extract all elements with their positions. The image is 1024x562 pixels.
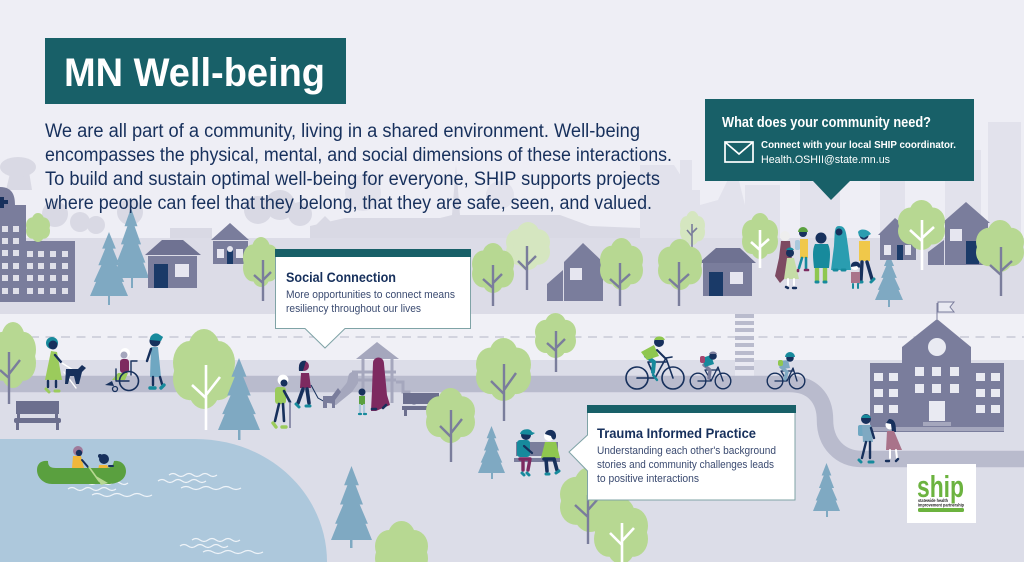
- woman in teal robe: [831, 226, 851, 270]
- SHIP logo: statewide health: [918, 498, 948, 503]
- upper ground: [0, 238, 1024, 316]
- small child: [851, 262, 860, 288]
- tree: [243, 237, 279, 301]
- contact callout: [705, 99, 974, 200]
- icon: envelope: [725, 142, 753, 162]
- bench by playground: [402, 393, 439, 416]
- road centre dashes: [30, 336, 1024, 338]
- tree left edge: [0, 322, 36, 404]
- bench left: [14, 401, 61, 430]
- intro paragraph: where people can feel that they belong, that they are safe, seen, and valued.: [44, 193, 652, 214]
- callout: trauma informed practice: to positive interactions: [597, 473, 699, 485]
- pine tree: [813, 463, 840, 517]
- far pines: [90, 208, 903, 307]
- intro paragraph: To build and sustain optimal well-being for everyone, SHIP supports projects: [45, 169, 660, 190]
- callout: social connection: [275, 249, 471, 348]
- callout: trauma informed practice: Understanding each other's background: [597, 445, 776, 457]
- house 5: [878, 218, 916, 260]
- tree behind hospital: [26, 213, 50, 242]
- lower ground: [0, 360, 1024, 562]
- hospital cross: [0, 197, 8, 208]
- elder with cane: [273, 375, 290, 428]
- lower trees: [0, 313, 576, 430]
- tree bottom: [375, 521, 428, 562]
- title block: MN Well-being: [64, 51, 325, 95]
- callout: social connection: More opportunities to connect means: [286, 289, 455, 301]
- cyclist one: [626, 336, 684, 389]
- pine tree back: [113, 208, 149, 288]
- callout: trauma informed practice: Trauma Informed Practice: [597, 425, 756, 441]
- crosswalk: [735, 314, 754, 377]
- pine tree front: [90, 232, 128, 305]
- pine tree: [331, 466, 372, 548]
- playground: [328, 342, 414, 405]
- person with guide dog: [45, 337, 86, 392]
- flag: [937, 302, 954, 319]
- tree: [600, 238, 643, 306]
- tree: [472, 243, 514, 306]
- title block: [45, 38, 346, 104]
- big white trunk tree: [173, 329, 235, 430]
- white trunk tree bottom: [594, 498, 648, 562]
- house 6: [928, 202, 990, 265]
- woman in maroon robe: [371, 358, 390, 411]
- distant city skyline: [0, 122, 1021, 242]
- light tree: [506, 222, 550, 290]
- cyclist two: [690, 352, 731, 389]
- tree on road: [535, 313, 576, 372]
- callout: trauma informed practice: [569, 405, 796, 500]
- small light tree: [680, 211, 705, 249]
- tree behind callout: [560, 467, 620, 544]
- callout: social connection: Social Connection: [286, 269, 396, 285]
- girl walking: [886, 419, 902, 461]
- intro paragraph: encompasses the physical, mental, and social dimensions of these interactions.: [45, 145, 672, 166]
- houses: [145, 202, 990, 301]
- pine tree: [478, 426, 505, 479]
- road band: [0, 314, 1024, 360]
- tree: [658, 239, 702, 306]
- large tree: [476, 338, 531, 421]
- house 1: [145, 240, 201, 288]
- intro paragraph: [44, 121, 672, 214]
- SHIP logo: ship: [917, 469, 964, 504]
- person in teal and green: [813, 232, 830, 282]
- house 2: [211, 223, 249, 264]
- two people on bench: [514, 429, 560, 475]
- contact callout: Connect with your local SHIP coordinator.: [761, 139, 956, 151]
- white trunk tree: [742, 213, 778, 268]
- boy walking: [858, 414, 874, 462]
- canoe with two paddlers: [37, 446, 126, 485]
- pine tree on path: [218, 358, 260, 440]
- standing woman: [147, 333, 164, 388]
- callout: trauma informed practice: stories and community challenges leads: [597, 459, 774, 471]
- footpath: [0, 384, 1024, 459]
- community group: [775, 226, 874, 288]
- house 4: [699, 248, 756, 296]
- white trunk tree: [898, 200, 945, 270]
- SHIP logo: improvement partnership: [918, 502, 964, 508]
- intro paragraph: We are all part of a community, living in a shared environment. Well-being: [45, 121, 640, 142]
- child with backpack: [795, 227, 808, 271]
- child in green dress: [784, 248, 799, 288]
- tree: [976, 220, 1024, 296]
- hospital building: [0, 187, 75, 302]
- elder in maroon: [775, 231, 792, 283]
- lake: [0, 439, 327, 562]
- callout: social connection: resiliency throughout our lives: [286, 303, 421, 315]
- cyclist three: [767, 352, 805, 389]
- house 3: [547, 243, 603, 301]
- water ripples: [68, 474, 263, 554]
- pine tree right of group: [875, 254, 903, 307]
- person in yellow: [858, 230, 874, 282]
- school: [870, 302, 1004, 432]
- child at playground: [358, 388, 366, 414]
- SHIP logo: [907, 464, 976, 523]
- contact callout: Health.OSHII@state.mn.us: [761, 154, 890, 166]
- person in wheelchair: [105, 348, 138, 392]
- woman walking dog: [296, 361, 341, 408]
- upper trees: [243, 200, 1024, 306]
- tree by bench: [426, 388, 475, 462]
- contact callout: What does your community need?: [722, 115, 931, 131]
